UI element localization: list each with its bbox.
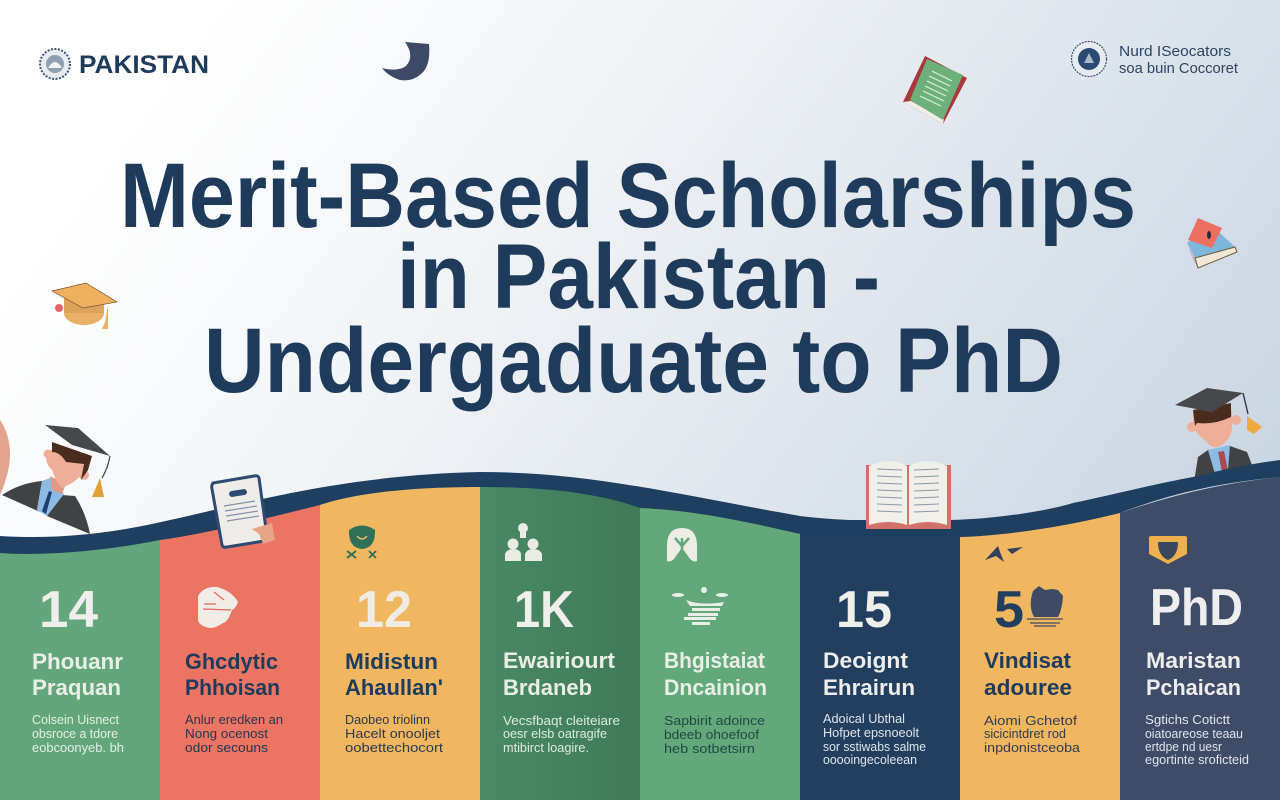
panel: coral column (160, 495, 320, 800)
column 2 content: Nong ocenost (185, 727, 269, 741)
icon: gold shield badge (1149, 536, 1187, 564)
column 2 content: Ghcdytic (185, 649, 278, 674)
title (120, 145, 1136, 412)
icon: green book (903, 56, 967, 124)
illustration: right graduate (1175, 388, 1262, 482)
column 7 content: inpdonistceoba (984, 741, 1080, 755)
title: in Pakistan - (397, 226, 880, 328)
wave band (0, 460, 1280, 554)
column 6 content: 15 (836, 581, 892, 639)
column 5 content: heb sotbetsirn (664, 742, 755, 756)
panel: navy column (800, 520, 960, 800)
logo: partner seal and text: soa buin Coccoret (1119, 61, 1238, 77)
column 6 content: Ehrairun (823, 675, 915, 700)
icon: coral column badge (198, 587, 238, 628)
column 3 content (345, 526, 444, 755)
column 4 content: Ewairiourt (503, 648, 616, 673)
column 2 content (185, 587, 283, 755)
title: Undergaduate to PhD (204, 310, 1063, 412)
column 5 content: Dncainion (664, 675, 767, 700)
column 1 content: 14 (39, 581, 98, 639)
column 1 content: obsroce a tdore (32, 727, 118, 741)
column 8 content: oiatoareose teaau (1145, 727, 1243, 741)
column 8 content: Pchaican (1146, 675, 1241, 700)
column 1 content: Praquan (32, 675, 121, 700)
column 2 content: odor secouns (185, 741, 268, 755)
panel: second amber column (960, 513, 1120, 800)
icon: tree emblem (1027, 586, 1063, 626)
illustration: open book (866, 461, 951, 529)
column 2 content: Anlur eredken an (185, 713, 283, 727)
column 8 content: Sgtichs Cotictt (1145, 713, 1231, 727)
column 3 content: Ahaullan' (345, 675, 443, 700)
column 3 content: 12 (356, 581, 412, 639)
column 8 content: ertdpe nd uesr (1145, 740, 1222, 754)
logo: Pakistan (40, 49, 209, 79)
column 6 content: Deoignt (823, 648, 909, 673)
panel: slate column (1120, 477, 1280, 800)
column 6 content: sor sstiwabs salme (823, 740, 926, 754)
column 8 content: egortinte sroficteid (1145, 753, 1249, 767)
illustration: left graduate (0, 420, 110, 534)
column 5 content: bdeeb ohoefoof (664, 728, 760, 742)
column 1 content: Phouanr (32, 649, 123, 674)
column 6 content: ooooingecoleean (823, 753, 917, 767)
illustration: document held in hand (212, 476, 275, 547)
logo: partner seal and text (1072, 42, 1238, 77)
column 4 content: 1K (514, 581, 574, 639)
icon: orange graduation cap (52, 283, 117, 329)
column 8 content: PhD (1150, 579, 1243, 637)
column 6 content (823, 581, 926, 767)
icon: crescent moon (382, 42, 429, 80)
column 3 content: oobettechocort (345, 741, 444, 755)
column 7 content: Aiomi Gchetof (984, 714, 1078, 728)
column 2 content: Phhoisan (185, 675, 280, 700)
column 1 content (32, 581, 124, 755)
column 4 content: Vecsfbaqt cleiteiare (503, 714, 620, 728)
column 5 content: Sapbirit adoince (664, 714, 765, 728)
column 7 content: Vindisat (984, 648, 1072, 673)
icon: leaf arch (667, 528, 697, 561)
column 8 content (1145, 536, 1249, 767)
icon: layered dish (672, 587, 728, 625)
panel: light green column (640, 505, 800, 800)
icon: group of people (505, 523, 542, 561)
panel: amber column (320, 480, 480, 800)
column 4 content: mtibirct loagire. (503, 741, 589, 755)
column 5 content: Bhgistaiat (664, 648, 766, 673)
column 4 content (503, 523, 620, 755)
logo: Pakistan: PAKISTAN (79, 51, 209, 79)
column 1 content: Colsein Uisnect (32, 713, 120, 727)
column 6 content: Hofpet epsnoeolt (823, 726, 920, 740)
column 7 content: sicicintdret rod (984, 727, 1066, 741)
logo: partner seal and text: Nurd ISeocators (1119, 44, 1231, 60)
column 3 content: Midistun (345, 649, 438, 674)
icon: books with red cap (1187, 218, 1237, 268)
panel: green column (0, 530, 160, 800)
icon: green shield with crossed marks (347, 526, 376, 558)
column 3 content: Hacelt onooljet (345, 727, 441, 741)
title: Merit-Based Scholarships (120, 145, 1136, 247)
column 5 content (664, 528, 767, 756)
icon: birds (985, 546, 1023, 562)
column 1 content: eobcoonyeb. bh (32, 741, 124, 755)
panel: dark green column (480, 480, 640, 800)
column 7 content: 5 (994, 581, 1024, 639)
column 7 content (984, 546, 1080, 755)
column 4 content: Brdaneb (503, 675, 592, 700)
column 3 content: Daobeo triolinn (345, 713, 430, 727)
column 6 content: Adoical Ubthal (823, 712, 905, 726)
column 8 content: Maristan (1146, 648, 1241, 673)
column 4 content: oesr elsb oatragife (503, 727, 607, 741)
column 7 content: adouree (984, 675, 1072, 700)
